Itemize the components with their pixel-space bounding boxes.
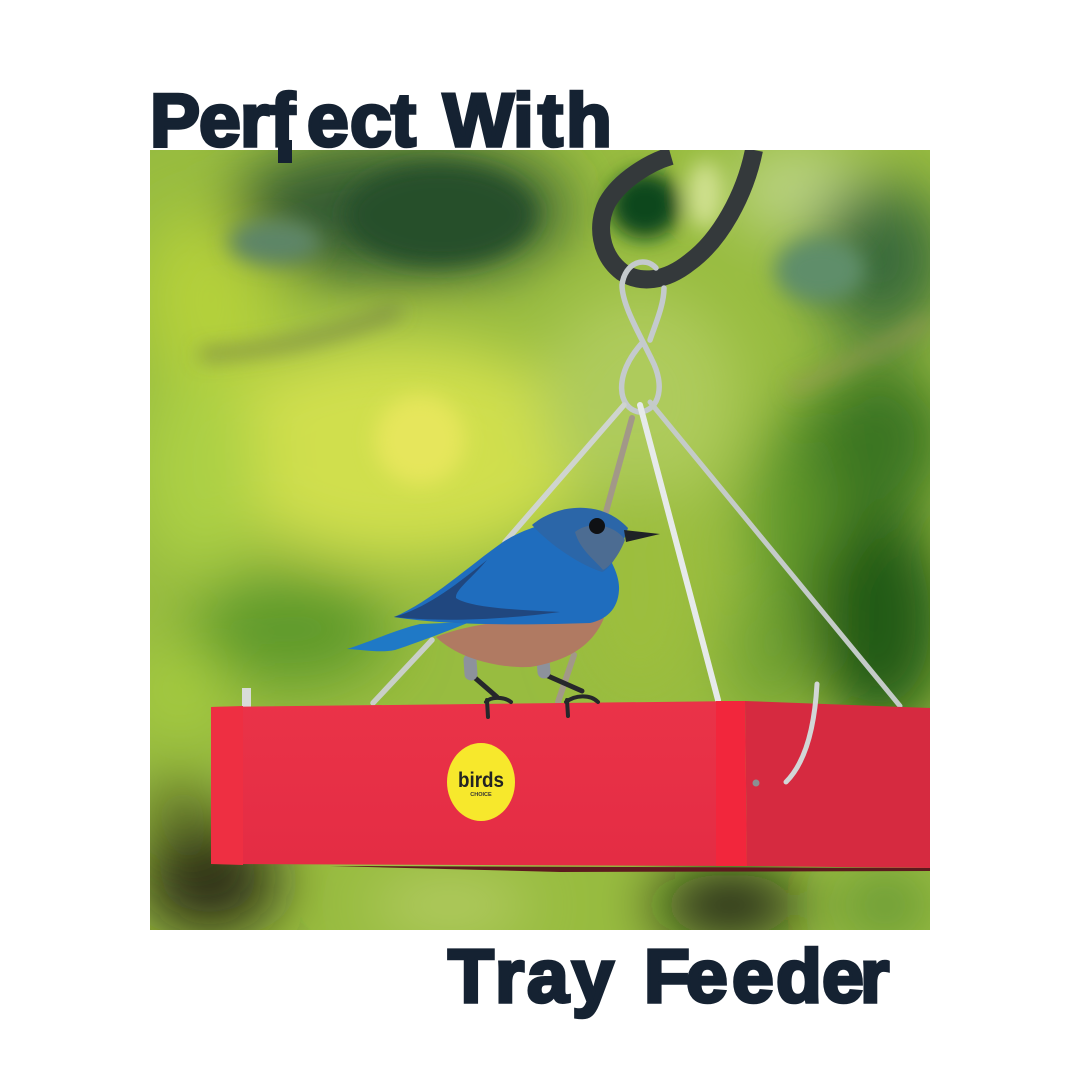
belly <box>436 616 604 667</box>
metal hook on tray <box>786 684 817 782</box>
bluebird <box>347 508 660 717</box>
eye <box>589 518 605 534</box>
S-hook <box>622 262 664 412</box>
tray feeder <box>211 684 930 872</box>
beak <box>624 530 660 542</box>
wire hangers <box>373 402 900 706</box>
title: Tray Feeder: Tray Feeder <box>448 934 889 1018</box>
logo badge <box>447 743 515 821</box>
logo badge: birds <box>458 769 504 792</box>
blurred foliage backdrop <box>135 140 950 937</box>
head <box>532 508 628 572</box>
title: Perfect With: Perfect With <box>150 78 612 162</box>
legs <box>470 660 598 717</box>
body and wing <box>394 523 619 624</box>
tail <box>347 622 470 651</box>
hanging hook <box>601 150 754 279</box>
photo: bluebird on red tray feeder <box>135 140 950 937</box>
logo badge: CHOICE <box>470 792 492 798</box>
